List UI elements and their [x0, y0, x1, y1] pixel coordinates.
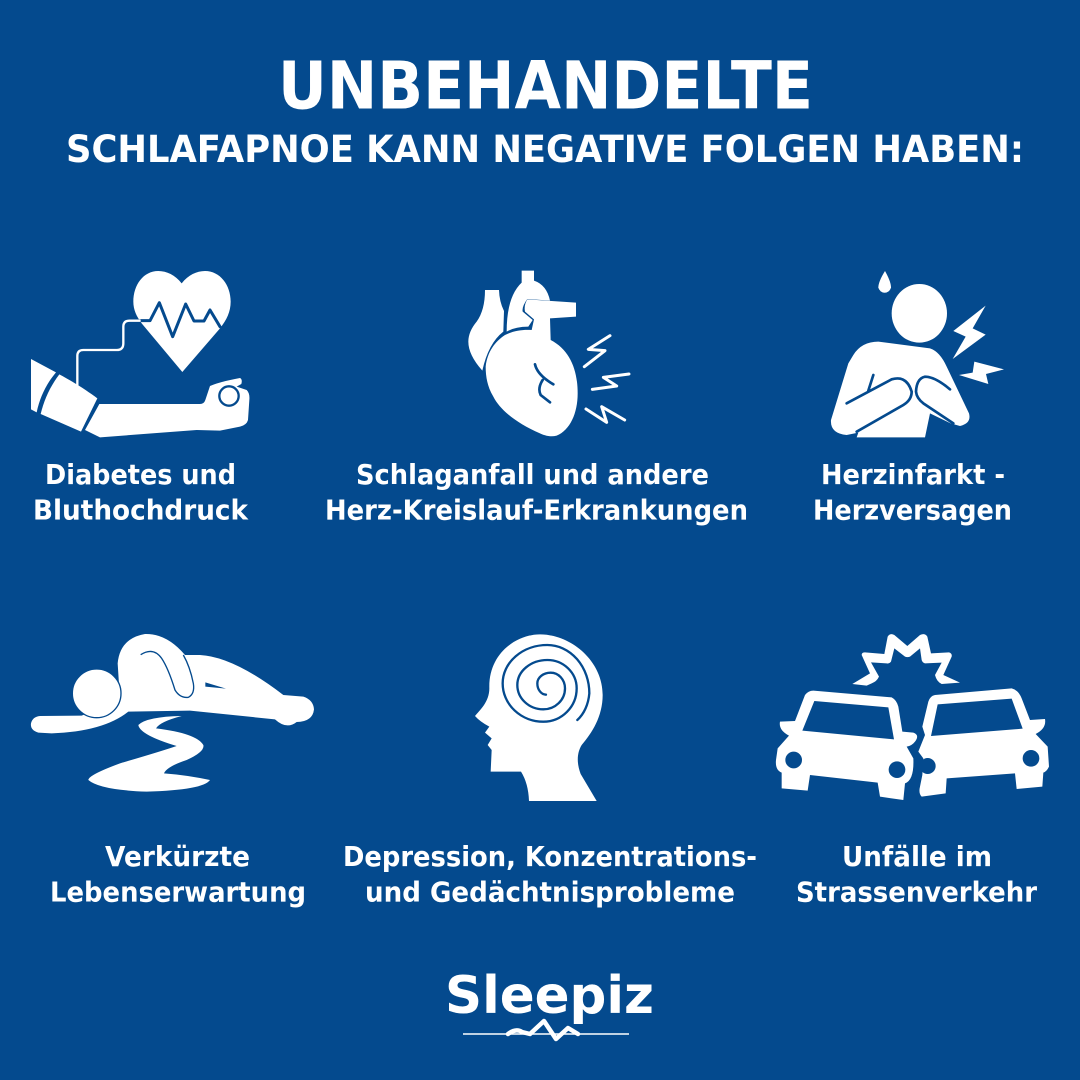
label: life expectancy: Lebenserwartung [50, 876, 306, 908]
title: SCHLAFAPNOE KANN NEGATIVE FOLGEN HABEN: [66, 128, 1024, 171]
label: traffic accidents [796, 841, 1037, 908]
label: traffic accidents: Unfälle im [842, 841, 992, 873]
label: heart attack: Herzinfarkt - [821, 459, 1005, 491]
icon: car crash [776, 634, 1049, 800]
label: stroke [325, 459, 748, 526]
title: UNBEHANDELTE [278, 48, 813, 124]
label: stroke: Schlaganfall und andere [356, 459, 709, 491]
label: stroke: Herz-Kreislauf-Erkrankungen [325, 494, 748, 526]
label: depression: Depression, Konzentrations- [343, 841, 757, 873]
label: depression: und Gedächtnisprobleme [365, 876, 735, 908]
label: heart attack: Herzversagen [813, 494, 1012, 526]
icon: arm with blood pressure cuff and heart [31, 271, 249, 437]
label: diabetes: Bluthochdruck [33, 494, 249, 526]
icon: anatomical heart with shocks [468, 271, 629, 436]
label: life expectancy: Verkürzte [105, 841, 250, 873]
icon: head with spiral [475, 634, 603, 801]
logo: Sleepiz: Sleepiz [445, 966, 654, 1026]
title [66, 48, 1024, 171]
label: heart attack [813, 459, 1012, 526]
label: life expectancy [50, 841, 306, 908]
label: traffic accidents: Strassenverkehr [796, 876, 1037, 908]
icon: collapsed person with puddle [31, 634, 314, 792]
icon: person with chest pain [831, 271, 1004, 437]
label: diabetes: Diabetes und [45, 459, 236, 491]
label: diabetes [33, 459, 249, 526]
label: depression [343, 841, 757, 908]
